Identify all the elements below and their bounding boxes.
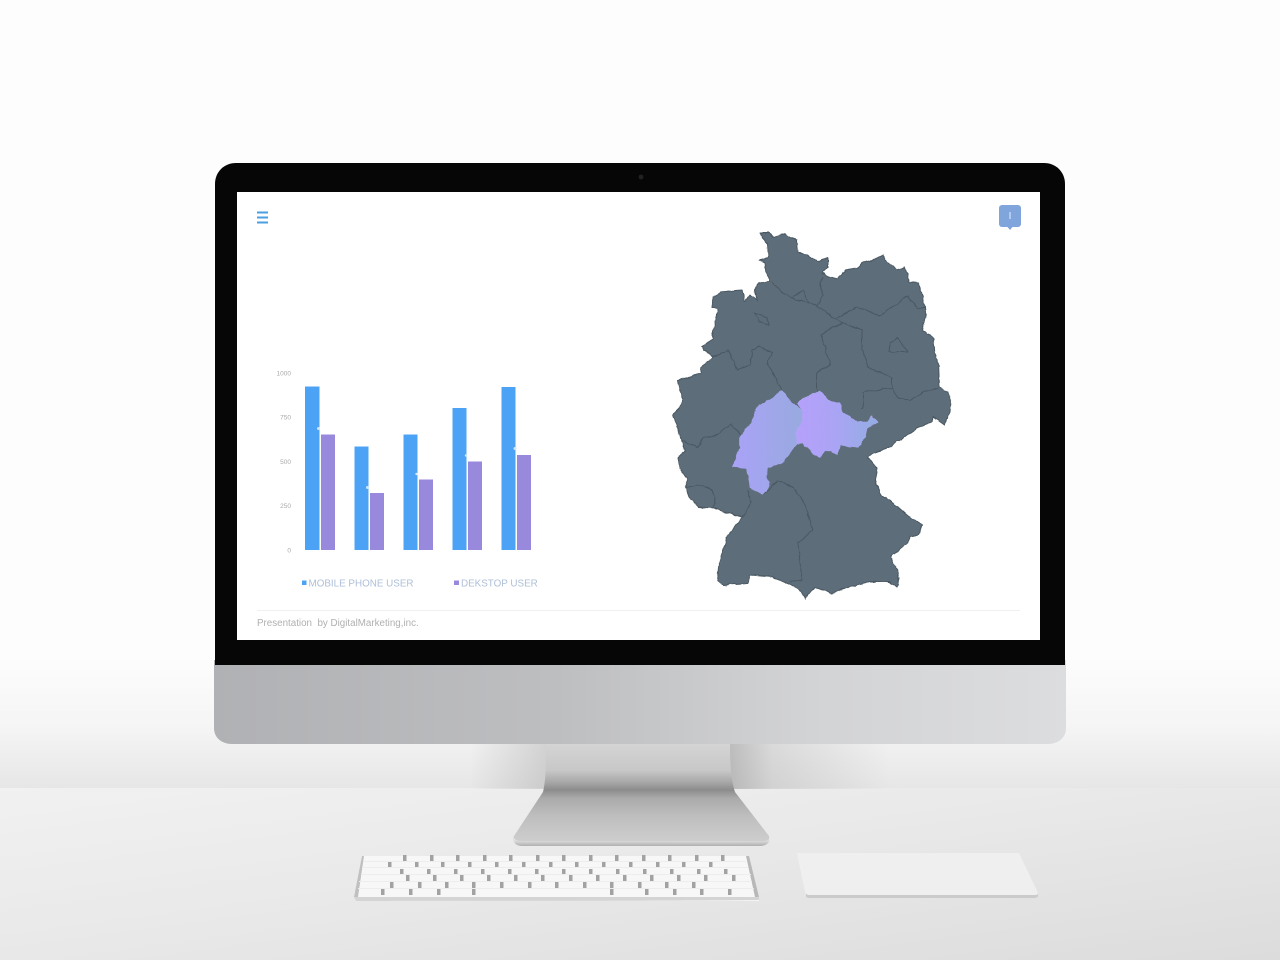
- bar value marks: [317, 427, 516, 489]
- screen: [237, 192, 1040, 640]
- y axis labels: 250: [280, 503, 291, 510]
- y axis labels: 1000: [277, 370, 291, 378]
- monitor bezel: [215, 163, 1065, 665]
- map: base outline: [673, 233, 951, 599]
- keyboard row lines: [358, 861, 754, 889]
- y axis labels: 0: [287, 548, 291, 554]
- y axis labels: [277, 370, 291, 554]
- trackpad: [797, 853, 1038, 898]
- footer text: Presentation by DigitalMarketing,inc.: [257, 618, 419, 629]
- icon: notification bubble: [999, 205, 1021, 230]
- map: highlighted Thuringia: [795, 391, 878, 458]
- map: state borders: [682, 277, 938, 582]
- monitor shadow on wall: [470, 744, 890, 789]
- y axis labels: 750: [280, 414, 291, 422]
- webcam: [639, 175, 643, 179]
- keyboard body: [354, 856, 759, 901]
- legend: desktop user: DEKSTOP USER: [461, 578, 538, 590]
- map: highlighted Hesse: [732, 390, 803, 495]
- monitor stand: [513, 744, 770, 846]
- footer divider: [257, 610, 1020, 611]
- icon: menu: [257, 212, 268, 224]
- y axis labels: 500: [280, 459, 291, 466]
- legend: mobile phone user: MOBILE PHONE USER: [308, 578, 414, 590]
- map of Germany: [673, 233, 951, 599]
- bar chart: mobile phone and desktop users: [277, 370, 538, 590]
- mobile phone bars: [305, 386, 516, 550]
- desk surface: [0, 788, 1280, 960]
- monitor: [214, 163, 1066, 744]
- monitor chin: [214, 660, 1066, 744]
- keyboard: [354, 855, 759, 901]
- keyboard key gaps: [381, 855, 736, 895]
- desktop bars: [321, 434, 531, 550]
